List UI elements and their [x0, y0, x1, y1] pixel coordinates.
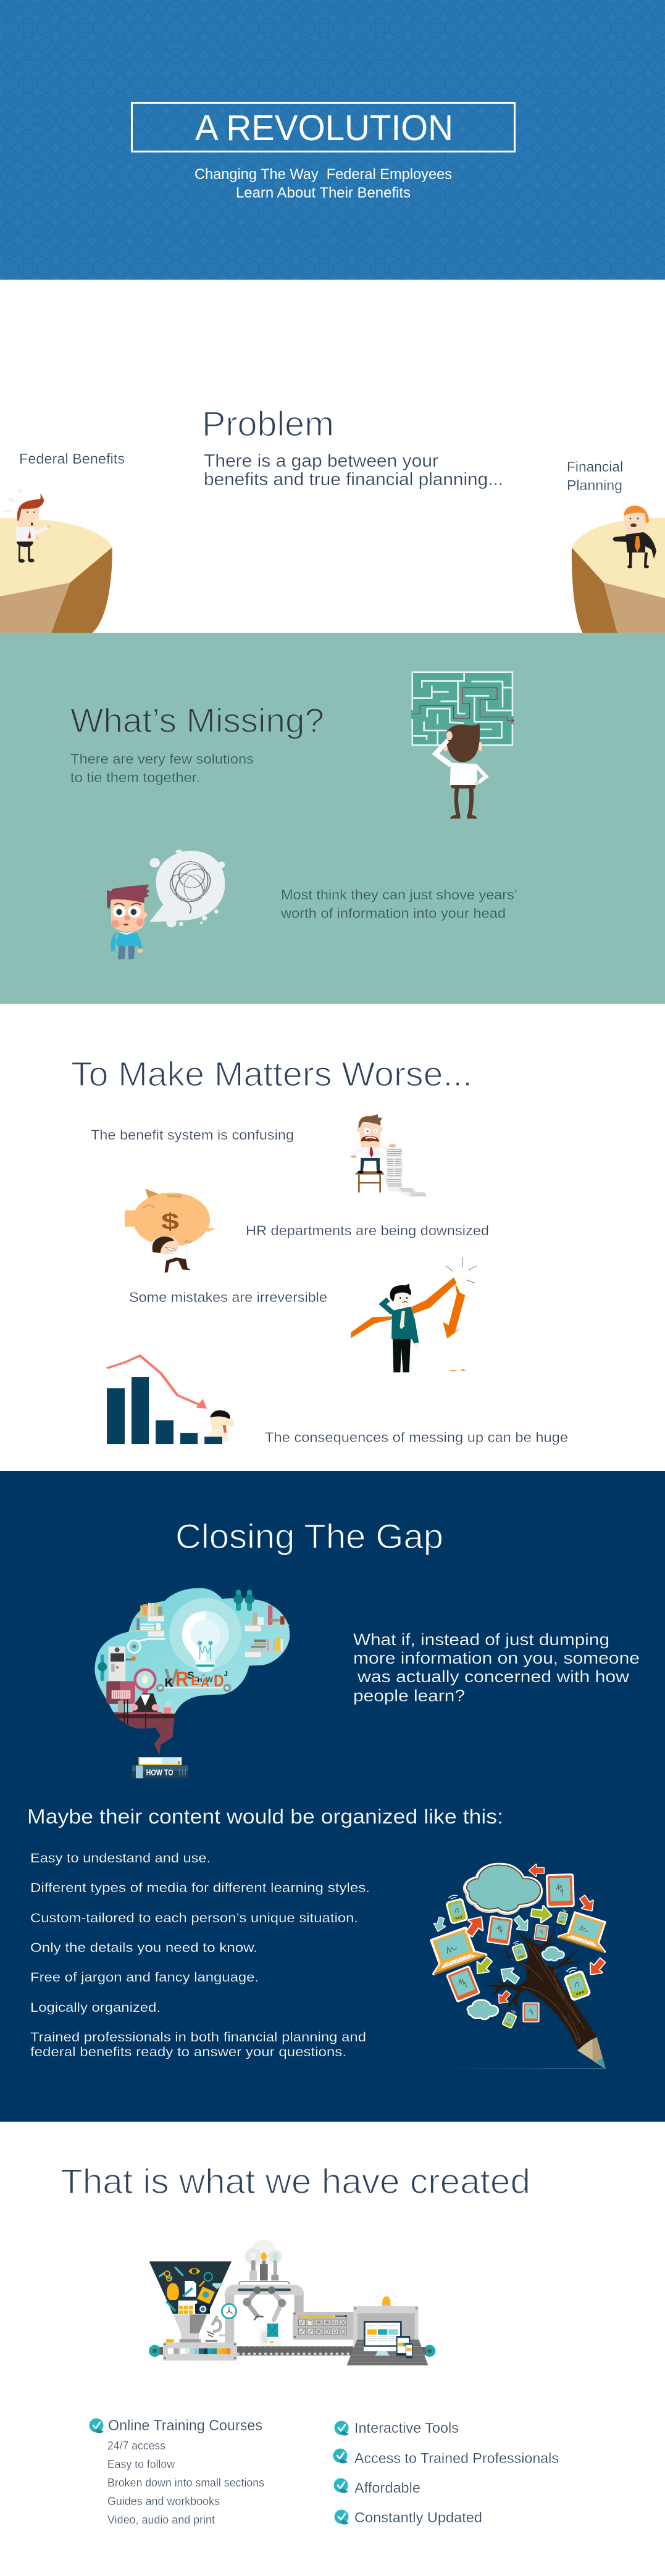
question: what if: people learn? [353, 1686, 465, 1705]
list of content qualities: Only the details you need to know. [30, 1941, 257, 1955]
panel: title banner [0, 0, 665, 280]
icon: man with broken arrow [351, 1257, 477, 1372]
clock [222, 2304, 236, 2319]
subtitle: Learn About Their Benefits [236, 185, 411, 201]
top clips [236, 1590, 252, 1611]
trunk [483, 1930, 597, 2051]
problem statement: There is a gap between your [204, 451, 438, 471]
letter pile: S [187, 1669, 194, 1681]
text: shove years' worth: Most think they can just shove years’ [281, 887, 517, 902]
output housing [353, 2306, 419, 2349]
subtitle [194, 166, 452, 201]
letter pile: V [164, 1665, 179, 1692]
clouds [466, 1866, 540, 1912]
label: Federal Benefits: Federal Benefits [19, 451, 125, 467]
left cliff [0, 518, 112, 633]
navy background [0, 1471, 665, 2122]
sub-features: Broken down into small sections [107, 2477, 264, 2489]
right cliff [572, 518, 665, 633]
subtitle: Changing The Way Federal Employees [194, 166, 452, 183]
letter pile: P [202, 1673, 205, 1678]
letter pile: R [175, 1668, 189, 1691]
pencil tip [577, 2037, 606, 2069]
heading: Closing The Gap: Closing The Gap [175, 1517, 443, 1556]
bullet: Interactive Tools: Interactive Tools [354, 2420, 459, 2436]
sub-features: 24/7 access [107, 2440, 165, 2452]
text: HR departments: HR departments are being downsized [246, 1223, 489, 1238]
bullet: Online Training Courses [89, 2417, 264, 2526]
text: benefit system: The benefit system is confusing [91, 1127, 294, 1143]
arch [225, 2295, 234, 2343]
teal background [0, 633, 665, 1004]
panel: that is what we have created [61, 2162, 559, 2526]
panel: closing the gap [0, 1471, 665, 2122]
text: shove years' worth [280, 887, 517, 921]
right man [613, 506, 656, 568]
text: few solutions [70, 751, 254, 785]
heading: What's Missing?: What’s Missing? [70, 701, 324, 740]
sub-features: Video, audio and print [107, 2514, 215, 2526]
arrows [462, 1864, 608, 2006]
laptops [422, 1925, 487, 1975]
list of content qualities: Different types of media for different learning styles. [30, 1881, 370, 1895]
bullet: Access to Trained Professionals: Access to Trained Professionals [354, 2450, 559, 2466]
letter pile: K [165, 1677, 174, 1690]
sub-features: Guides and workbooks [107, 2495, 220, 2507]
text: irreversible mistakes: Some mistakes are irreversible [129, 1290, 327, 1305]
label: Online Training Courses [108, 2417, 262, 2434]
question: what if: What if, instead of just dumping [353, 1630, 609, 1649]
letter pile: W [206, 1675, 213, 1684]
conveyor [236, 2346, 355, 2356]
package and window [260, 2329, 280, 2346]
letter pile [164, 1665, 228, 1692]
check icon [89, 2419, 104, 2433]
icon: man carrying piggy bank [125, 1189, 216, 1272]
label: Financial Planning: Planning [567, 477, 622, 493]
list of content qualities: Logically organized. [30, 2001, 161, 2015]
bullet: Constantly Updated: Constantly Updated [354, 2509, 482, 2525]
illustration: production line machine [149, 2240, 435, 2366]
letter pile: J [224, 1670, 228, 1678]
text: consequences: The consequences of messing up can be huge [265, 1430, 568, 1445]
sub-features: Easy to follow [107, 2458, 175, 2470]
magnifier head [135, 1670, 155, 1690]
panel: to make matters worse [71, 1054, 568, 1445]
bullet: Affordable: Affordable [354, 2480, 420, 2496]
shelves [129, 1603, 289, 1657]
funnel [149, 2261, 232, 2314]
robot arms [247, 2290, 282, 2320]
title: A REVOLUTION [195, 108, 453, 148]
heading: Problem: Problem [202, 404, 334, 444]
list of content qualities: Custom-tailored to each person’s unique situation. [30, 1911, 358, 1925]
icon: man on chair with paper [350, 1114, 427, 1197]
text: few solutions: There are very few solutions [70, 751, 254, 767]
label: Financial Planning [567, 459, 623, 493]
tablets [546, 1874, 575, 1908]
panel: what's missing [0, 633, 665, 1004]
illustration: pencil tree with devices [422, 1864, 613, 2069]
bullet: Affordable [333, 2478, 420, 2496]
icon: man carrying piggy bank: $ [161, 1209, 179, 1234]
sub-features [107, 2440, 264, 2526]
chart: falling bars with person [107, 1356, 234, 1444]
list of content qualities: federal benefits ready to answer your questions. [30, 2045, 346, 2059]
heading: That is what we have created [61, 2162, 530, 2201]
problem statement: benefits and true financial planning... [204, 470, 503, 490]
heading: To Make Matters Worse... [71, 1054, 472, 1093]
left machine [109, 1646, 125, 1682]
list of content qualities: Trained professionals in both financial planning and [30, 2030, 366, 2045]
letter pile: A [201, 1677, 209, 1690]
letter pile: E [191, 1674, 199, 1688]
question: what if: more information on you, someone [353, 1649, 640, 1667]
patterned blue background [0, 0, 665, 280]
control panel [293, 2312, 354, 2340]
panel: problem [0, 404, 665, 633]
list of content qualities: Easy to undestand and use. [30, 1851, 211, 1865]
list of content qualities [30, 1851, 370, 2059]
phones [444, 1893, 469, 1925]
problem statement [204, 451, 503, 490]
letter pile: H [198, 1677, 202, 1684]
list of content qualities: Free of jargon and fancy language. [30, 1970, 259, 1985]
text: few solutions: to tie them together. [70, 770, 200, 785]
subheading: organized like this: Maybe their content would be organized like this: [27, 1805, 503, 1828]
gears [149, 2345, 161, 2357]
confused person with thought bubble [107, 849, 225, 959]
illustration: idea cloud over a how-to book [94, 1588, 290, 1778]
maze with man [411, 671, 514, 819]
label: Financial Planning: Financial [567, 459, 623, 475]
base plate with colour strip [163, 2343, 237, 2361]
microscope [212, 2316, 220, 2332]
left man [4, 488, 51, 563]
illustration: idea cloud over a how-to book: HOW TO [146, 1767, 174, 1777]
text: shove years' worth: worth of information into your head [280, 906, 506, 921]
title box [132, 102, 515, 152]
bulbs [250, 2240, 277, 2267]
letter pile: D [214, 1671, 224, 1690]
question: what if [353, 1630, 640, 1705]
how-to book stack [138, 1757, 182, 1765]
question: what if: was actually concerned with how [357, 1667, 630, 1686]
